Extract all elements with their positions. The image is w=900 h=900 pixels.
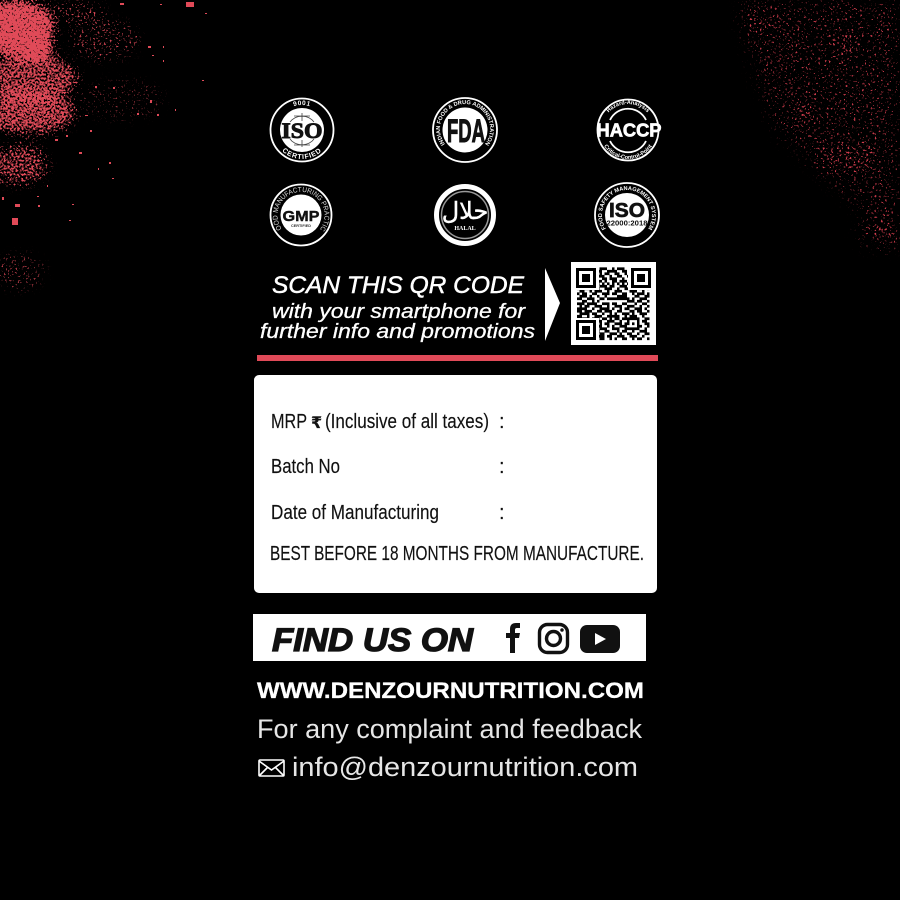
badge: ISO 9001 certified: ISO bbox=[282, 118, 322, 143]
text: best before: BEST BEFORE 18 MONTHS FROM MANUFACTURE. bbox=[270, 543, 644, 565]
heading: scan this QR code: SCAN THIS QR CODE bbox=[272, 272, 525, 299]
badge: Indian FDA: FDA bbox=[447, 113, 485, 149]
badge: Halal bbox=[436, 186, 494, 244]
text: complaint and feedback: For any complaint and feedback bbox=[257, 714, 643, 744]
paint splatter: top left bbox=[0, 0, 207, 290]
badge: ISO 22000:2018 food safety: FOOD SAFETY MANAGEMENT SYSTEM bbox=[598, 186, 656, 230]
paint splatter: top right bbox=[735, 0, 900, 250]
field: MRP: : bbox=[499, 411, 505, 433]
QR code bbox=[571, 262, 656, 345]
contact email bbox=[259, 752, 638, 782]
red divider bar bbox=[257, 355, 658, 361]
badge: Halal: حلال bbox=[442, 197, 488, 225]
field: batch number bbox=[271, 456, 505, 478]
field: date of manufacturing: Date of Manufacturing bbox=[271, 502, 439, 524]
badge: Halal: HALAL bbox=[454, 226, 476, 232]
field: MRP: (Inclusive of all taxes) bbox=[325, 411, 489, 433]
badge: ISO 22000:2018 food safety: ISO bbox=[609, 200, 645, 222]
text: smartphone instruction: further info and promotions bbox=[260, 320, 535, 343]
text: smartphone instruction bbox=[260, 300, 535, 343]
panel: product details card bbox=[254, 375, 657, 593]
badge: GMP certified: GOOD MANUFACTURING PRACTICE bbox=[272, 187, 330, 232]
badge: ISO 9001 certified bbox=[270, 98, 334, 162]
badge: HACCP: Hazard-Analysis bbox=[606, 100, 649, 112]
field: date of manufacturing: : bbox=[499, 502, 505, 524]
badge: ISO 9001 certified: CERTIFIED bbox=[282, 148, 320, 159]
QR call to action bbox=[260, 262, 656, 345]
badge: HACCP: Critical-Control-Point bbox=[604, 144, 652, 159]
text: smartphone instruction: with your smartphone for bbox=[272, 300, 526, 323]
badge: GMP certified: CERTIFIED bbox=[291, 224, 311, 228]
icon: envelope bbox=[259, 760, 284, 776]
website url: WWW.DENZOURNUTRITION.COM bbox=[257, 678, 644, 703]
badge: HACCP: HACCP bbox=[596, 120, 662, 140]
field: batch number: Batch No bbox=[271, 456, 340, 478]
badge: GMP certified bbox=[270, 184, 332, 246]
badge: HACCP bbox=[596, 98, 662, 162]
badge: GMP certified: GMP bbox=[282, 208, 320, 225]
icon: facebook bbox=[506, 623, 520, 653]
icon: youtube bbox=[580, 625, 620, 653]
badge: ISO 22000:2018 food safety bbox=[594, 182, 660, 248]
field: batch number: : bbox=[499, 456, 505, 478]
text: email address: info@denzournutrition.com bbox=[292, 752, 638, 782]
badge: Indian FDA: INDIAN FOOD & DRUG ADMINISTRATION bbox=[436, 100, 494, 146]
badge: Indian FDA bbox=[432, 97, 498, 163]
icon: instagram bbox=[540, 624, 568, 652]
social bar bbox=[253, 614, 646, 661]
field: MRP: ₹ bbox=[311, 413, 322, 432]
badge: ISO 22000:2018 food safety: 22000:2018 bbox=[606, 218, 648, 228]
arrow bbox=[545, 268, 560, 341]
field: MRP: MRP bbox=[271, 411, 307, 433]
certification badges bbox=[270, 97, 662, 248]
badge: ISO 9001 certified: 9001 bbox=[293, 100, 310, 106]
heading: find us on: FIND US ON bbox=[272, 622, 474, 658]
